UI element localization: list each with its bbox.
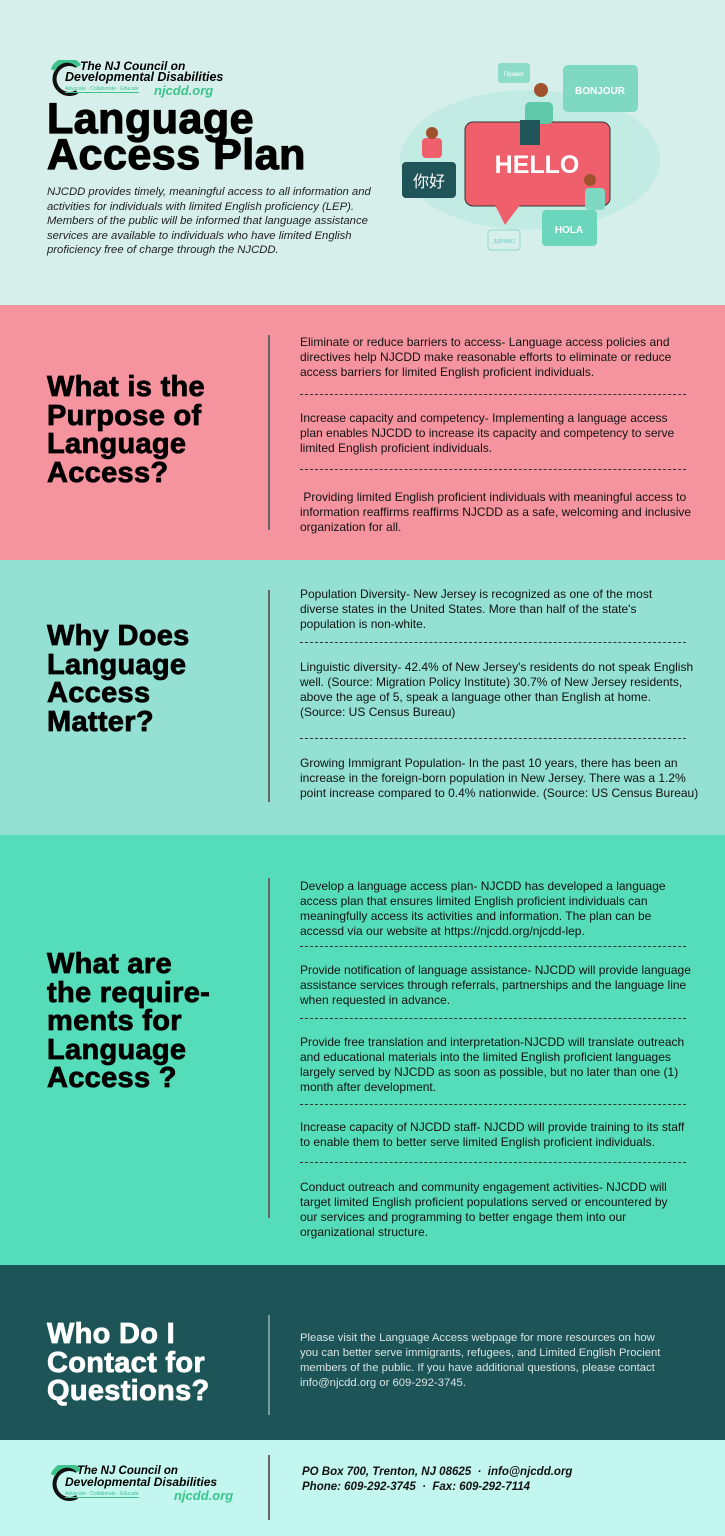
heading: purpose <box>46 371 205 488</box>
heading: requirements: What are <box>47 948 172 980</box>
purpose items <box>300 335 691 534</box>
requirement items: meaningfully access its activities and information. The plan can be <box>300 909 651 923</box>
purpose items: access barriers for limited English proficient individuals. <box>300 365 594 379</box>
requirement items: Develop a language access plan- NJCDD has developed a language <box>300 879 666 893</box>
why items: Growing Immigrant Population- In the past 10 years, there has been an <box>300 756 678 770</box>
heading: why: Language <box>47 648 186 680</box>
contact text: members of the public. If you have additional questions, please contact <box>300 1362 655 1374</box>
why items: Population Diversity- New Jersey is recognized as one of the most <box>300 587 652 601</box>
intro text: proficiency free of charge through the NJCDD. <box>47 244 279 256</box>
contact text: you can better serve immigrants, refugees, and Limited English Procient <box>300 1347 660 1359</box>
footer logo: The NJ Council on <box>77 1465 178 1477</box>
title: Access Plan <box>47 131 306 179</box>
why items: well. (Source: Migration Policy Institute) 30.7% of New Jersey residents, <box>300 675 682 689</box>
title <box>47 95 306 179</box>
why items <box>300 587 698 800</box>
purpose items: Providing limited English proficient individuals with meaningful access to <box>303 490 686 504</box>
why items: population is non-white. <box>300 617 426 631</box>
heading: purpose: Language <box>47 428 186 460</box>
purpose items: directives help NJCDD make reasonable efforts to eliminate or reduce <box>300 350 671 364</box>
requirement items: Provide notification of language assistance- NJCDD will provide language <box>300 963 691 977</box>
footer logo: njcdd.org <box>174 1488 233 1503</box>
requirement items: largely served by NJCDD as soon as possible, but no later than one (1) <box>300 1065 678 1079</box>
purpose items: information reaffirms reaffirms NJCDD as a safe, welcoming and inclusive <box>300 505 691 519</box>
illustration: speech bubbles: BONJOUR <box>575 86 626 97</box>
why items: point increase compared to 0.4% nationwide. (Source: US Census Bureau) <box>300 786 698 800</box>
purpose items: organization for all. <box>300 520 401 534</box>
illustration: speech bubbles: Привет <box>504 72 524 78</box>
heading: requirements: Access ? <box>47 1062 177 1094</box>
illustration: speech bubbles: HOLA <box>555 225 583 236</box>
heading: contact: Questions? <box>47 1375 210 1407</box>
title: Language <box>47 95 254 143</box>
heading: contact: Who Do I <box>47 1318 175 1350</box>
requirement items: accessd via our website at https://njcdd.org/njcdd-lep. <box>300 924 585 938</box>
heading: requirements <box>46 948 210 1094</box>
panel: why it matters <box>0 560 725 835</box>
panel: purpose <box>0 305 725 560</box>
footer logo: Developmental Disabilities <box>65 1475 217 1489</box>
illustration: speech bubbles: ЗДРАВО <box>493 239 516 245</box>
why items: increase in the foreign-born population in New Jersey. There was a 1.2% <box>300 771 686 785</box>
heading: purpose: Purpose of <box>47 400 201 432</box>
why items: (Source: US Census Bureau) <box>300 705 455 719</box>
footer logo <box>50 1465 233 1503</box>
requirement items: to enable them to better serve limited English proficient individuals. <box>300 1135 655 1149</box>
logo: Advocate · Collaborate · Educate <box>65 86 139 92</box>
logo: njcdd.org <box>154 83 213 98</box>
logo: The NJ Council on <box>80 59 185 73</box>
intro text: NJCDD provides timely, meaningful access to all information and <box>47 186 371 198</box>
purpose items: Increase capacity and competency- Implementing a language access <box>300 411 668 425</box>
requirement items: when requested in advance. <box>300 993 450 1007</box>
purpose items: limited English proficient individuals. <box>300 441 492 455</box>
footer <box>0 1440 725 1536</box>
heading: requirements: the require- <box>47 976 210 1008</box>
requirement items: Increase capacity of NJCDD staff- NJCDD will provide training to its staff <box>300 1120 684 1134</box>
logo <box>50 59 223 98</box>
contact text <box>300 1332 660 1389</box>
illustration: speech bubbles: HELLO <box>495 151 579 179</box>
requirement items: and educational materials into the limited English proficient languages <box>300 1050 671 1064</box>
illustration: speech bubbles: 你好 <box>413 168 445 192</box>
why items: diverse states in the United States. More than half of the state's <box>300 602 636 616</box>
requirement items: Conduct outreach and community engagement activities- NJCDD will <box>300 1180 667 1194</box>
requirement items: assistance services through referrals, partnerships and the language line <box>300 978 686 992</box>
requirement items: organizational structure. <box>300 1225 428 1239</box>
footer address: PO Box 700, Trenton, NJ 08625 · info@njcdd.org <box>302 1466 572 1478</box>
heading: requirements: Language <box>47 1034 186 1066</box>
purpose items: plan enables NJCDD to increase its capacity and competency to serve <box>300 426 674 440</box>
footer address <box>302 1466 572 1493</box>
footer address: Phone: 609-292-3745 · Fax: 609-292-7114 <box>302 1481 530 1493</box>
purpose items: Eliminate or reduce barriers to access- Language access policies and <box>300 335 670 349</box>
heading: requirements: ments for <box>47 1005 182 1037</box>
heading: contact <box>46 1318 210 1407</box>
header section <box>0 0 725 305</box>
requirement items: target limited English proficient populations served or encountered by <box>300 1195 668 1209</box>
requirement items: month after development. <box>300 1080 436 1094</box>
illustration: speech bubbles <box>400 63 660 250</box>
footer logo: Advocate · Collaborate · Educate <box>65 1491 139 1497</box>
intro text: Members of the public will be informed that language assistance <box>47 215 368 227</box>
logo: Developmental Disabilities <box>65 70 223 84</box>
requirement items: Provide free translation and interpretation-NJCDD will translate outreach <box>300 1035 684 1049</box>
why items: Linguistic diversity- 42.4% of New Jersey's residents do not speak English <box>300 660 693 674</box>
intro text <box>46 186 372 256</box>
contact text: info@njcdd.org or 609-292-3745. <box>300 1377 466 1389</box>
heading: why <box>46 620 190 738</box>
panel: requirements <box>0 835 725 1265</box>
heading: contact: Contact for <box>47 1346 205 1378</box>
contact text: Please visit the Language Access webpage for more resources on how <box>300 1332 655 1344</box>
requirement items <box>300 879 691 1239</box>
intro text: services are available to individuals who have limited English <box>47 230 352 242</box>
heading: why: Access <box>47 677 150 709</box>
heading: purpose: Access? <box>47 456 168 488</box>
panel: contact <box>0 1265 725 1440</box>
requirement items: our services and programming to better engage them into our <box>300 1210 626 1224</box>
intro text: activities for individuals with limited English proficiency (LEP). <box>47 201 354 213</box>
requirement items: access plan that ensures limited English proficient individuals can <box>300 894 648 908</box>
why items: above the age of 5, speak a language other than English at home. <box>300 690 651 704</box>
heading: why: Why Does <box>47 620 190 652</box>
heading: why: Matter? <box>47 706 154 738</box>
heading: purpose: What is the <box>47 371 205 403</box>
